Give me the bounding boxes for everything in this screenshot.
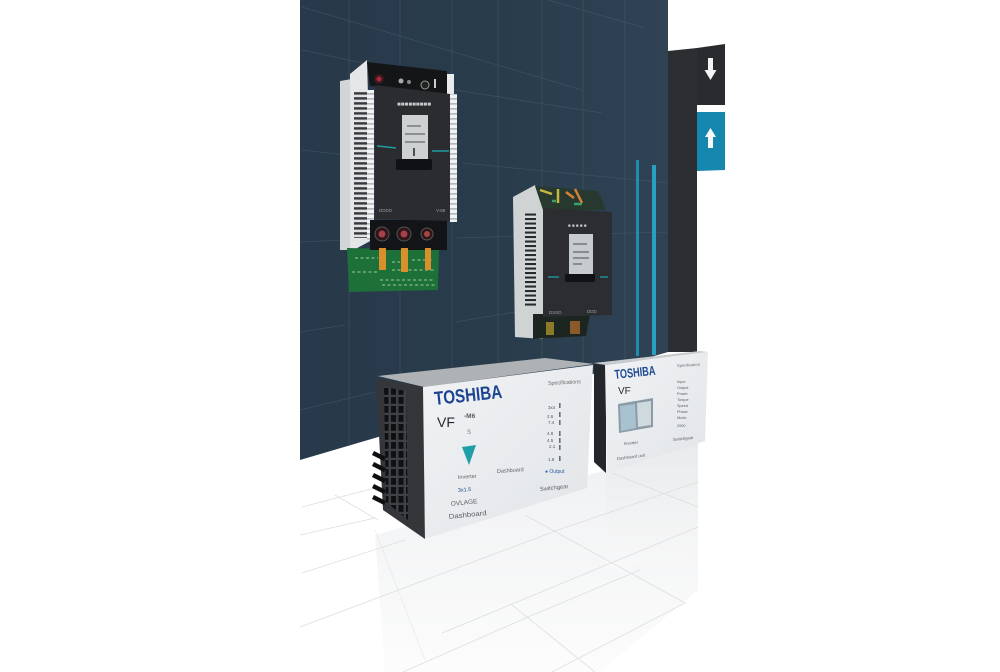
drive: copper straps bbox=[379, 248, 431, 272]
drive: lower labels: V-88 bbox=[436, 208, 446, 213]
box: sub mark: S bbox=[467, 430, 471, 436]
box: spec list: 2.6 bbox=[547, 414, 554, 419]
box: spec list: 1.8 bbox=[548, 457, 555, 462]
drive: left heatsink bbox=[340, 60, 374, 252]
small drive: lower labels: DDD bbox=[587, 309, 597, 314]
small drive: colored wires bbox=[540, 189, 582, 204]
wall panel bbox=[300, 0, 668, 460]
small box: bottom labels: Dashboard unit bbox=[617, 452, 646, 461]
small box: spec list: Input bbox=[677, 380, 686, 384]
small box: bottom labels: Inverter bbox=[624, 440, 639, 446]
box: bottom labels: 3x1.5 bbox=[458, 487, 472, 494]
drive: lower labels bbox=[379, 208, 446, 213]
box: spec list bbox=[547, 405, 556, 462]
box: spec list: 2.1 bbox=[549, 444, 556, 449]
box: spec list: 7.4 bbox=[548, 420, 555, 425]
small box: bottom labels: Switchgear bbox=[673, 435, 694, 442]
box: top-right label: Specifications bbox=[548, 379, 581, 387]
drive: display keypad bbox=[396, 115, 432, 170]
small box: product photo bbox=[618, 398, 653, 433]
small drive: display keypad bbox=[565, 234, 595, 282]
drive: teal accents bbox=[377, 146, 449, 151]
button: up arrow bbox=[697, 112, 725, 171]
box: bottom labels bbox=[448, 467, 569, 521]
small wall drive bbox=[513, 185, 612, 339]
small box: brand: TOSHIBA bbox=[614, 363, 657, 382]
drive: model label: ■■■■■■■■■ bbox=[397, 102, 431, 108]
box: heatsink fins bbox=[373, 453, 385, 503]
small box: top-right label: Specification bbox=[677, 362, 700, 368]
box: front face bbox=[423, 365, 593, 539]
small box: spec list bbox=[677, 380, 689, 428]
small box: spec list: Output bbox=[677, 386, 689, 390]
small drive: top terminals bbox=[535, 186, 606, 210]
box: vented side bbox=[376, 378, 425, 539]
large wall drive bbox=[340, 60, 457, 292]
small drive: lower labels bbox=[549, 309, 597, 315]
drive: front cover bbox=[375, 85, 450, 221]
small drive: left heatsink bbox=[513, 185, 543, 339]
small box: dark side bbox=[594, 364, 606, 473]
drive: right heatsink bbox=[446, 74, 457, 222]
small box: spec list: Phase bbox=[677, 410, 688, 414]
box: top face bbox=[378, 358, 594, 387]
small box: spec list: Power bbox=[677, 392, 688, 396]
floor bbox=[300, 440, 698, 672]
small drive: lower labels: DSSD bbox=[549, 310, 562, 315]
box: brand: TOSHIBA bbox=[433, 382, 503, 410]
small box: spec list: 2000 bbox=[677, 424, 685, 428]
small box: spec list: Mode bbox=[677, 416, 686, 420]
dark side column bbox=[668, 48, 697, 352]
box: bottom labels: Dashboard bbox=[497, 467, 524, 475]
small box: top edge bbox=[594, 351, 708, 365]
small drive: bottom terminals bbox=[533, 314, 590, 339]
box: spec list: 4.5 bbox=[547, 438, 554, 443]
small box: spec list: Speed bbox=[677, 404, 688, 408]
drive: lower labels: DDDD bbox=[379, 208, 393, 213]
box: bottom labels: Switchgear bbox=[540, 484, 569, 493]
small product box bbox=[594, 351, 708, 473]
box: spec list: 4.8 bbox=[547, 431, 554, 436]
large product box bbox=[373, 358, 594, 539]
small box: spec list: Torque bbox=[677, 398, 689, 402]
box: teal triangle bbox=[462, 445, 476, 465]
box: blue note: ● Output bbox=[545, 469, 565, 475]
box: bottom labels: Dashboard bbox=[448, 510, 487, 521]
drive: top terminals bbox=[367, 62, 447, 94]
small box: front face bbox=[605, 352, 708, 473]
box: bottom labels: OVLAGE bbox=[450, 498, 478, 508]
box: model suffix: -M6 bbox=[464, 413, 476, 420]
drive: circuit traces bbox=[352, 258, 436, 285]
teal vertical lines bbox=[636, 160, 656, 356]
button: down arrow bbox=[697, 44, 725, 105]
box: spec marks bbox=[559, 403, 561, 461]
box: spec list: 3x4 bbox=[548, 405, 556, 410]
drive: board panel bbox=[347, 248, 439, 292]
box: model name: VF bbox=[437, 414, 455, 430]
small drive: teal accents bbox=[548, 276, 608, 278]
small drive: front cover bbox=[543, 208, 612, 317]
box: bottom labels: Inverter bbox=[458, 474, 477, 481]
small drive: model label: ■ ■ ■ ■ ■ bbox=[568, 223, 587, 228]
drive: lower terminal block bbox=[370, 220, 447, 250]
small box: bottom labels bbox=[617, 435, 694, 461]
small box: model name: VF bbox=[618, 386, 631, 397]
